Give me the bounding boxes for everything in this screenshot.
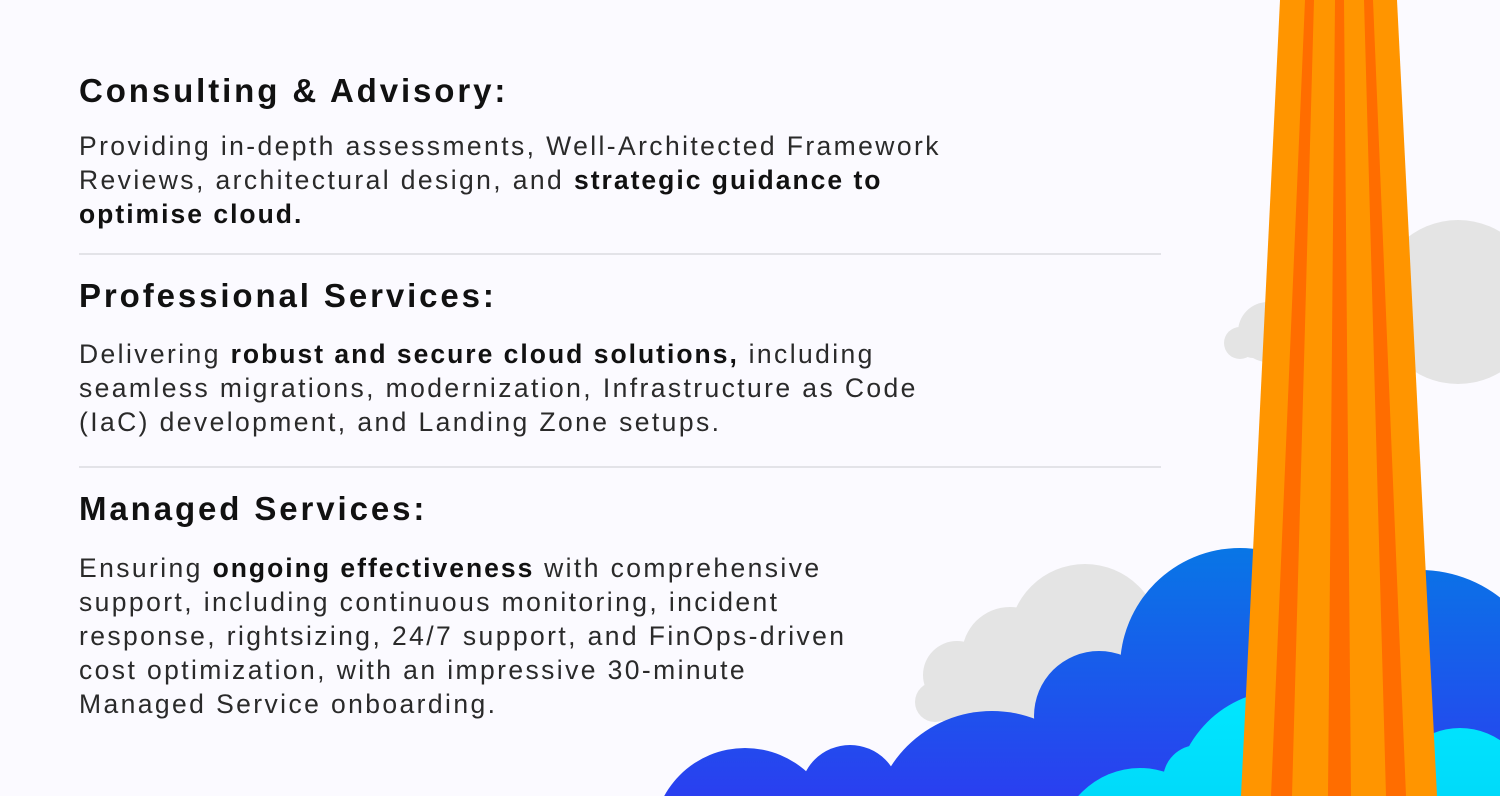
- text: managed services: Managed Service onboarding.: [79, 689, 497, 719]
- text: consulting: Providing in-depth assessments, Well-Architected Framework: [79, 131, 941, 161]
- text: managed services: response, rightsizing, 24/7 support, and FinOps-driven: [79, 621, 846, 651]
- text: consulting: optimise cloud.: [79, 199, 303, 229]
- text: professional services: (IaC) development, and Landing Zone setups.: [79, 407, 721, 437]
- rocket trail: [1241, 0, 1437, 796]
- text: professional services: seamless migrations, modernization, Infrastructure as Code: [79, 373, 918, 403]
- text: professional services: Delivering robust and secure cloud solutions, including: [79, 339, 875, 369]
- cloud: gray top right: [1224, 220, 1500, 384]
- cloud: gray lower: [915, 564, 1161, 722]
- text: professional services: [79, 339, 918, 437]
- heading: consulting: Consulting & Advisory:: [79, 72, 508, 109]
- heading: managed services: Managed Services:: [79, 490, 427, 527]
- text: managed services: support, including continuous monitoring, incident: [79, 587, 779, 617]
- text: managed services: Ensuring ongoing effectiveness with comprehensive: [79, 553, 822, 583]
- cloud: blue: [653, 548, 1500, 796]
- text: managed services: [79, 553, 846, 719]
- cloud: cyan: [1058, 690, 1500, 796]
- heading: professional services: Professional Services:: [79, 277, 497, 314]
- text: managed services: cost optimization, with an impressive 30-minute: [79, 655, 747, 685]
- text: consulting: [79, 131, 941, 229]
- text: consulting: Reviews, architectural design, and strategic guidance to: [79, 165, 882, 195]
